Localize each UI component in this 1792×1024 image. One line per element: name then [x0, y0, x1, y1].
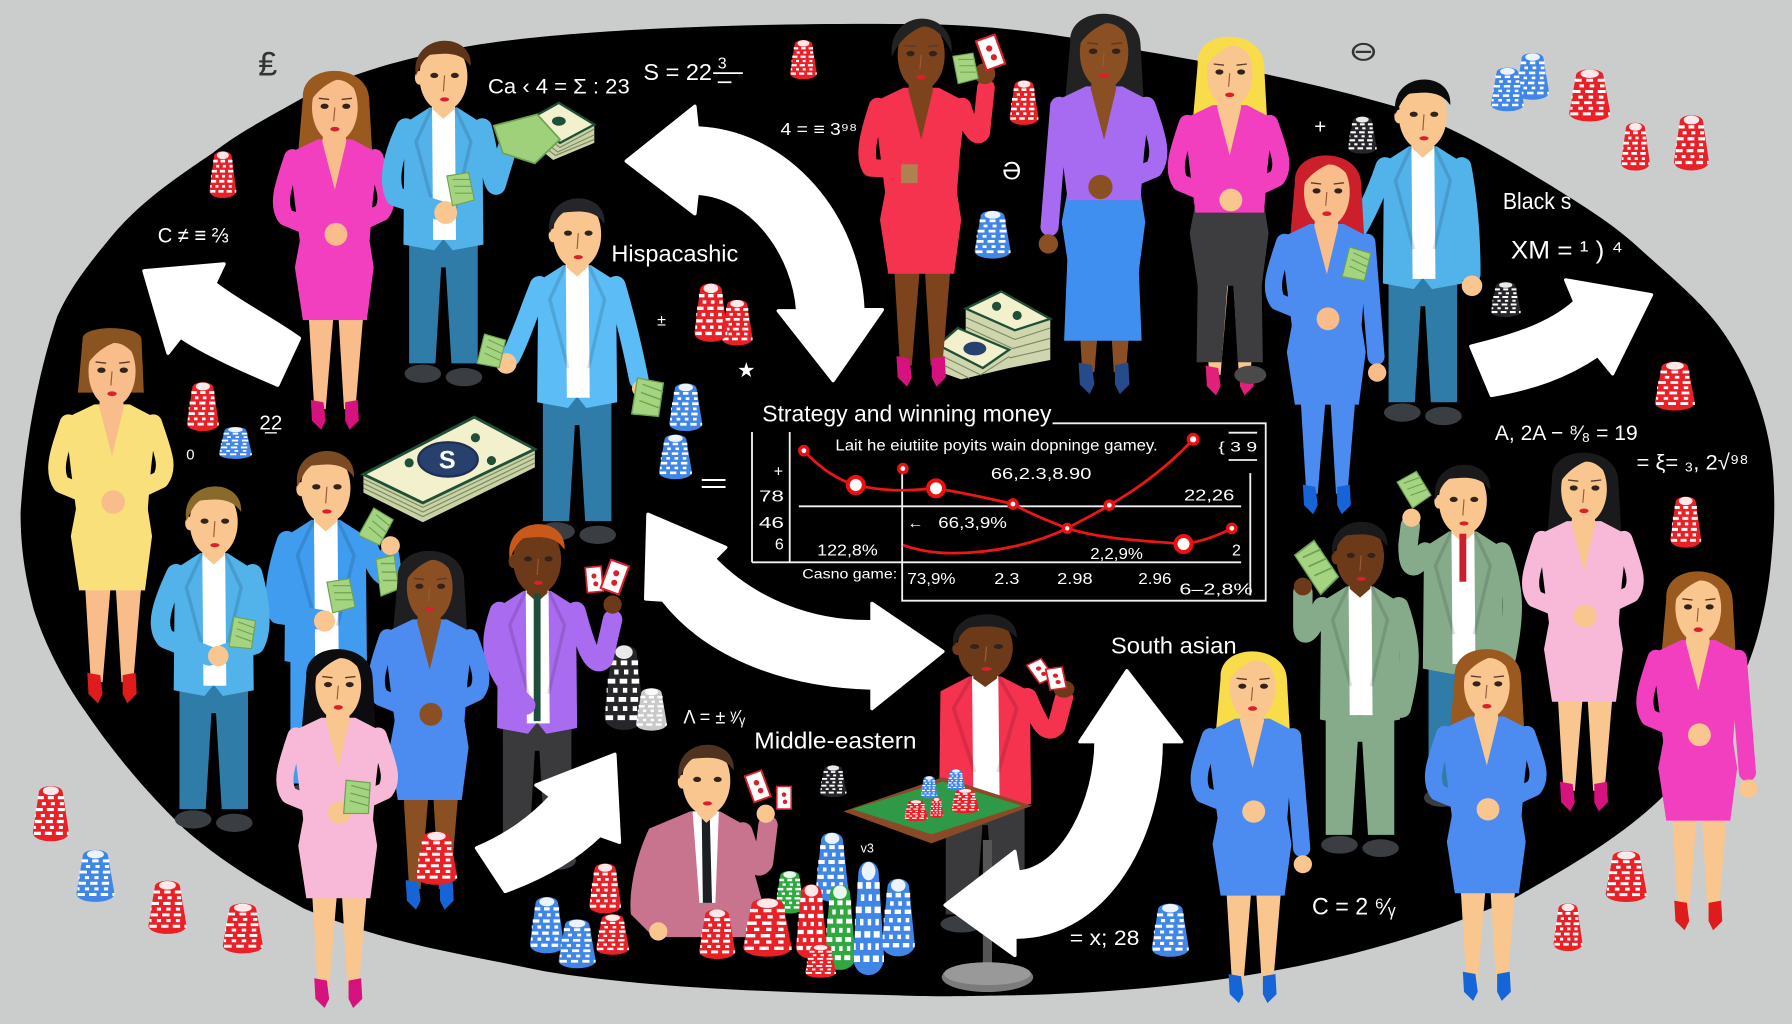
chart frame and axes	[752, 423, 1266, 601]
figure: man in blue jacket, centre	[472, 198, 670, 544]
figure: man in purple jacket with cards	[493, 524, 629, 870]
formula text: = ξ= ₃, 2√⁹⁸	[1637, 450, 1749, 475]
formula text: +	[1314, 116, 1326, 139]
panel: strategy chart	[752, 401, 1266, 601]
formula text: Ә	[1002, 157, 1021, 185]
formula text: C ≠ ≡ ⅔	[158, 222, 229, 247]
figure: man in blue jacket, right	[1352, 80, 1482, 425]
chart subtitle: Lait he eiutiite poyits wain dopninge gamey.	[835, 437, 1158, 454]
chart value labels: 73,9%	[907, 571, 955, 588]
figure: woman in light pink suit	[285, 649, 389, 1008]
label: Blacks: Black s	[1503, 188, 1571, 214]
formula text: v3	[861, 842, 874, 856]
chart value labels: Casno game:	[802, 566, 897, 581]
formula text: C = 2 ⁶⁄ᵧ	[1312, 893, 1396, 920]
figure: man in green suit with banknote	[1292, 522, 1409, 857]
label: South asian: South asian	[1111, 633, 1237, 659]
chart value labels: 22,26	[1184, 488, 1234, 505]
arrow: lower left arrow	[477, 754, 619, 891]
chart value labels	[759, 439, 1257, 598]
chart value labels: 78	[759, 489, 784, 506]
formula text: 2̲2	[259, 412, 282, 435]
figure: man in green suit with red tie	[1396, 465, 1512, 810]
formula text: XM = ¹ ) ⁴	[1511, 236, 1623, 264]
icon: casino table	[843, 769, 1032, 843]
formula text: A, 2A − ⁸⁄₈ = 19	[1495, 420, 1638, 445]
chart value labels: 6	[775, 537, 784, 554]
icon: banknote fan in man's hand	[494, 114, 560, 163]
formula text: =	[699, 468, 728, 499]
figure: red-haired woman in blue suit	[1273, 155, 1386, 514]
formula text: ★	[737, 359, 756, 382]
formula text: 0	[186, 447, 195, 463]
chart value labels: 66,3,9%	[938, 515, 1007, 532]
formula text: Λ = ± ʸ⁄ᵧ	[683, 706, 746, 728]
chart value labels: 122,8%	[817, 542, 878, 559]
icon: cash bundle top	[528, 103, 594, 160]
figure: blonde woman in blue suit	[1199, 651, 1312, 1003]
formula text: 3	[718, 56, 727, 73]
arrow: left arrow	[144, 264, 299, 385]
figure: man in light blue jacket, lower left	[160, 486, 261, 832]
figure: woman in purple top and long blue skirt	[1039, 14, 1158, 394]
chart value labels: 2.98	[1057, 571, 1093, 588]
icon: red chips beside woman	[416, 832, 457, 885]
line series one	[804, 451, 1232, 544]
label: Hispacashic: Hispacashic	[611, 241, 738, 267]
symbol: top right sign, dark: ⊖	[1349, 36, 1378, 67]
chart value labels: 66,2.3,8.90	[991, 466, 1092, 483]
chart markers	[800, 435, 1236, 552]
figure: man in blue jacket with cash	[392, 41, 507, 386]
chart value labels: 46	[759, 515, 784, 532]
label: Middle-eastern: Middle-eastern	[754, 728, 917, 754]
line series two	[903, 439, 1193, 553]
formula text	[158, 56, 1749, 950]
chart heading: Strategy and winning money	[762, 401, 1052, 427]
figure: woman in yellow suit	[57, 328, 165, 703]
arrow: lower right curved double arrow	[945, 671, 1182, 955]
arrow: lower centre double arrow	[646, 514, 943, 709]
icon: cash bundle large	[363, 417, 535, 522]
icon: chip pile in front of seated man	[530, 833, 915, 978]
figure: seated man in mauve jacket	[630, 745, 791, 941]
chart value labels: 2,2,9%	[1090, 546, 1143, 563]
figure: man in blue jacket with moustache	[276, 451, 400, 807]
chart value labels: 6–2,8%	[1179, 581, 1253, 598]
icon: stand of casino table	[942, 840, 1033, 992]
figure: blonde woman in pink jacket and dark trousers	[1176, 37, 1281, 395]
symbol: currency sign, dark: ₤	[258, 45, 277, 83]
figure: woman in blue suit, dark hair	[376, 551, 481, 910]
arrow: right arrow	[1471, 280, 1651, 395]
chart value labels: 2.96	[1138, 571, 1172, 588]
chart value labels: +	[774, 464, 783, 481]
chart value labels: { 3 9	[1218, 439, 1257, 454]
formula text: ±	[657, 313, 666, 330]
chart value labels: ←	[907, 515, 923, 532]
icon: cash bundles right	[938, 291, 1050, 379]
figure: woman in pink suit, far right	[1645, 571, 1758, 930]
formula text: = x; 28	[1070, 925, 1139, 950]
figure: woman in red suit with cards	[867, 17, 1005, 387]
formula text: 4 = ≡ 3⁹⁸	[781, 119, 857, 139]
figure: brown-haired woman in blue suit	[1433, 649, 1538, 1001]
figure: man in red jacket at table	[939, 614, 1075, 936]
formula text: Ca ‹ 4 = Σ : 23	[488, 74, 630, 99]
chart value labels: 2.3	[994, 571, 1020, 588]
chart value labels: 2	[1232, 542, 1241, 559]
formula text: S = 22	[643, 59, 712, 85]
figure: woman in light pink suit, right	[1531, 453, 1635, 811]
icon: cash bundle large: S	[439, 447, 456, 475]
figure: woman in pink suit, top left	[281, 71, 386, 430]
arrow: top curved double arrow	[626, 106, 882, 381]
